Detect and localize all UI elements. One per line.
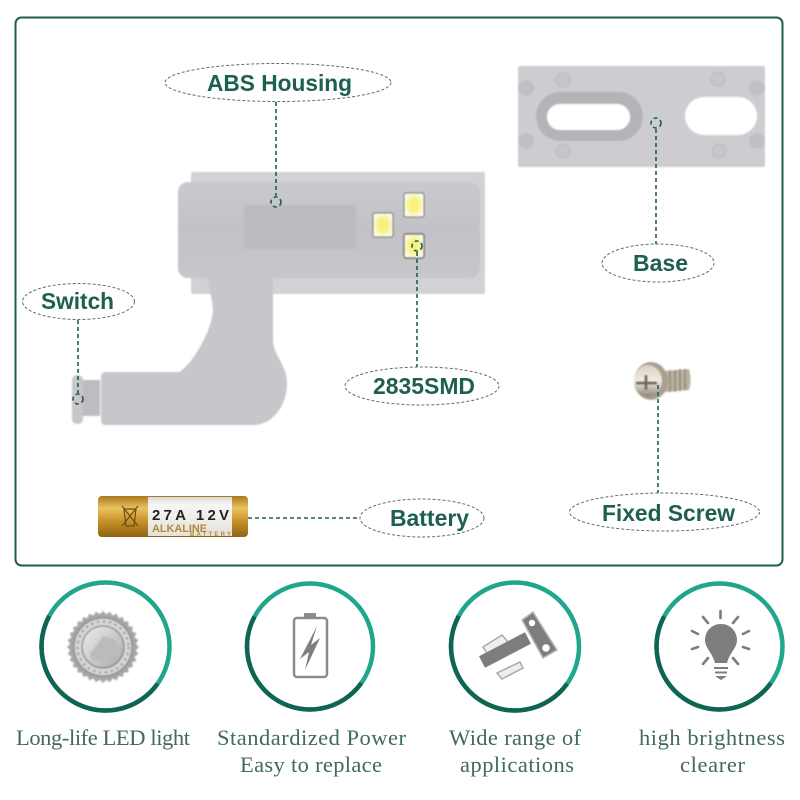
callout: Battery [248, 499, 484, 537]
feature: standardized power [217, 559, 406, 777]
callout: 2835SMD [345, 241, 499, 405]
screw [634, 362, 690, 400]
icon: seal with thumb [67, 611, 139, 683]
icon: light bulb [692, 611, 749, 680]
battery: BATTERY [190, 532, 231, 538]
callout: Switch: Switch [41, 288, 114, 314]
callout: Battery: Battery [390, 505, 469, 531]
caption: Wide range of [449, 725, 582, 750]
feature: long-life LED light [16, 557, 195, 750]
icon: hinge [482, 612, 557, 679]
panel: product components frame [16, 18, 782, 566]
caption: Long-life LED light [16, 725, 191, 750]
callout: Base: Base [633, 250, 688, 276]
icon ring [426, 557, 604, 736]
callout: ABS Housing [165, 64, 391, 207]
battery [98, 496, 248, 538]
icon ring [222, 559, 398, 734]
callout: Base [602, 118, 714, 282]
callout: 2835SMD: 2835SMD [373, 373, 475, 399]
callout: Fixed Screw [570, 385, 760, 531]
feature: high brightness [632, 559, 800, 777]
caption: high brightness [639, 725, 785, 750]
caption: Easy to replace [240, 752, 382, 777]
hinge LED light housing [72, 172, 485, 425]
caption: Standardized Power [217, 725, 406, 750]
caption [639, 725, 785, 777]
LED chips [373, 193, 424, 258]
caption: applications [460, 752, 574, 777]
callout: Switch [22, 284, 134, 404]
callout: ABS Housing: ABS Housing [207, 70, 352, 96]
caption: clearer [680, 752, 746, 777]
icon ring [16, 557, 195, 736]
battery: ALKALINE [152, 523, 207, 535]
caption [217, 725, 406, 777]
caption [449, 725, 582, 777]
callout: Fixed Screw: Fixed Screw [602, 500, 735, 526]
base plate [518, 66, 765, 167]
feature: wide range of applications [426, 557, 604, 777]
battery: 27A 12V [152, 507, 229, 524]
icon ring [632, 559, 800, 734]
icon: battery with bolt [294, 613, 327, 677]
